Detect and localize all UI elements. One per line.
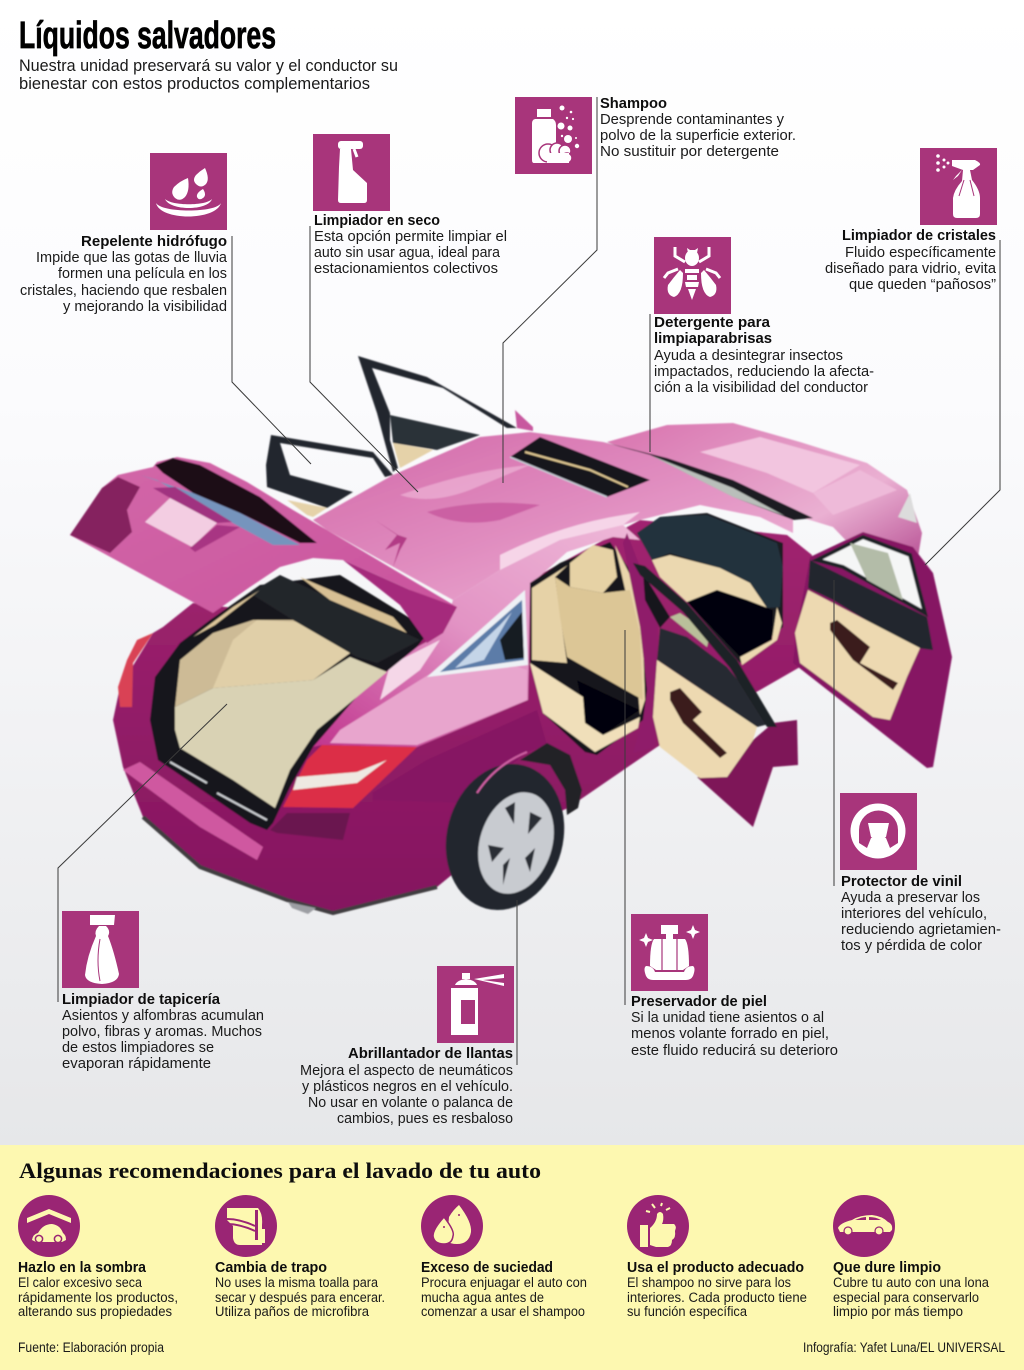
panel: Detergente para limpiaparabrisas bbox=[654, 237, 874, 396]
icon: sedan bbox=[833, 1195, 895, 1257]
icon: towel bbox=[215, 1195, 277, 1257]
illustration: pink car with open doors bbox=[70, 356, 952, 923]
icon: drops bbox=[150, 153, 227, 230]
left taillight bbox=[118, 633, 153, 707]
panel: Protector de vinil bbox=[840, 793, 1001, 954]
far front door bbox=[358, 356, 533, 472]
text: Detergente: impactados, reduciendo la afecta- bbox=[654, 364, 874, 380]
icon: mist spray bbox=[920, 148, 997, 225]
text: Protector de vinil: tos y pérdida de color bbox=[841, 938, 982, 954]
text: Hazlo en la sombra: alterando sus propiedades bbox=[18, 1304, 172, 1319]
item: Exceso de suciedad bbox=[421, 1195, 587, 1319]
text: Protector de vinil: reduciendo agrietamien- bbox=[841, 922, 1001, 938]
text: Usa el producto adecuado bbox=[627, 1260, 807, 1319]
dark shading on side bbox=[373, 710, 547, 803]
text: Que dure limpio: Cubre tu auto con una lona bbox=[833, 1275, 989, 1290]
text: Protector de vinil: interiores del vehículo, bbox=[841, 906, 987, 922]
roof bbox=[313, 432, 793, 600]
text: Shampoo: Desprende contaminantes y bbox=[600, 112, 785, 128]
text: Usa el producto adecuado: interiores. Cada producto tiene bbox=[627, 1290, 807, 1305]
source note: Fuente: Elaboración propia bbox=[18, 1340, 164, 1355]
near rear door open bbox=[633, 563, 798, 827]
text: Limpiador de tapicería bbox=[62, 992, 264, 1072]
far rear door bbox=[266, 435, 393, 517]
text: Hazlo en la sombra: El calor excesivo seca bbox=[18, 1275, 142, 1290]
text: Protector de vinil bbox=[841, 874, 1001, 954]
text: Repelente bbox=[20, 234, 228, 315]
text: Preservador de piel bbox=[631, 994, 838, 1059]
panel: Preservador de piel bbox=[631, 914, 838, 1059]
text: Detergente bbox=[654, 315, 874, 396]
text: Preservador de piel: este fluido reducirá su deterioro bbox=[631, 1043, 838, 1059]
panel: recomendaciones bbox=[0, 1145, 1024, 1370]
text: Detergente: Ayuda a desintegrar insectos bbox=[654, 348, 843, 364]
panel: Limpiador de tapicería bbox=[62, 911, 264, 1072]
text: Limpiador de tapicería: de estos limpiadores se bbox=[62, 1040, 214, 1056]
icon: car seat bbox=[631, 914, 708, 991]
recommendations heading: Algunas recomendaciones para el lavado de tu auto bbox=[19, 1158, 541, 1183]
panel: Repelente hidrófugo bbox=[20, 153, 228, 315]
text: Que dure limpio bbox=[833, 1260, 989, 1319]
text: Repelente: Repelente hidrófugo bbox=[81, 234, 227, 250]
text: Repelente: formen una película en los bbox=[58, 266, 227, 282]
text: Protector de vinil: Protector de vinil bbox=[841, 874, 962, 890]
text: Repelente: y mejorando la visibilidad bbox=[63, 299, 227, 315]
rear body bbox=[113, 520, 812, 913]
text: Limpiador de cristales: diseñado para vidrio, evita bbox=[825, 261, 997, 277]
text: Limpiador en seco: Esta opción permite limpiar el bbox=[314, 229, 507, 245]
text: Detergente: limpiaparabrisas bbox=[654, 331, 772, 347]
text: Cambia de trapo: secar y después para encerar. bbox=[215, 1290, 385, 1305]
item: Que dure limpio bbox=[833, 1195, 989, 1319]
text: Preservador de piel: menos volante forrado en piel, bbox=[631, 1026, 829, 1042]
text: Que dure limpio: limpio por más tiempo bbox=[833, 1304, 963, 1319]
text: Hazlo en la sombra: rápidamente los productos, bbox=[18, 1290, 178, 1305]
text: Preservador de piel: Preservador de piel bbox=[631, 994, 767, 1010]
front door opening bbox=[637, 513, 783, 665]
trunk interior bbox=[170, 575, 420, 820]
rear wheel bbox=[430, 751, 580, 923]
text: Exceso de suciedad: mucha agua antes de bbox=[421, 1290, 544, 1305]
trunk rim bbox=[150, 575, 428, 830]
icon: bee insect bbox=[654, 237, 731, 314]
text: Limpiador de tapicería: polvo, fibras y aromas. Muchos bbox=[62, 1024, 262, 1040]
near front door open bbox=[793, 532, 952, 768]
text: Protector de vinil: Ayuda a preservar los bbox=[841, 890, 980, 906]
text: Usa el producto adecuado: su función específica bbox=[627, 1304, 747, 1319]
windshield bbox=[603, 442, 813, 520]
text: Exceso de suciedad: Exceso de suciedad bbox=[421, 1260, 553, 1276]
text: Cambia de trapo bbox=[215, 1260, 385, 1319]
text: Repelente: cristales, haciendo que resbalen bbox=[20, 283, 227, 299]
roof mark bbox=[375, 520, 407, 567]
text: Abrillantador bbox=[300, 1046, 513, 1127]
tailgate bbox=[70, 457, 457, 643]
text: Abrillantador: Abrillantador de llantas bbox=[348, 1046, 513, 1062]
text: Shampoo bbox=[600, 96, 796, 160]
bumper strip bbox=[123, 762, 263, 860]
text: Limpiador de cristales: que queden “pañosos” bbox=[849, 277, 996, 293]
text: Cambia de trapo: Cambia de trapo bbox=[215, 1260, 327, 1276]
text: Repelente: Impide que las gotas de lluvia bbox=[36, 250, 228, 266]
sunroof bbox=[510, 437, 650, 497]
panel: Limpiador de cristales bbox=[825, 148, 997, 293]
icon: aerosol can bbox=[437, 966, 514, 1043]
text: Abrillantador: Mejora el aspecto de neumáticos bbox=[300, 1063, 513, 1079]
text: Exceso de suciedad: comenzar a usar el shampoo bbox=[421, 1304, 585, 1319]
pillar bbox=[623, 533, 658, 753]
intro text bbox=[19, 56, 398, 93]
text: Limpiador de tapicería: evaporan rápidamente bbox=[62, 1056, 211, 1072]
icon: spray bottle bbox=[313, 134, 390, 211]
text: Shampoo: No sustituir por detergente bbox=[600, 144, 779, 160]
text: Cambia de trapo: No uses la misma toalla para bbox=[215, 1275, 378, 1290]
icon: steering wheel bbox=[840, 793, 917, 870]
title: Líquidos salvadores bbox=[19, 15, 276, 57]
hood bbox=[607, 423, 922, 600]
text: Exceso de suciedad bbox=[421, 1260, 587, 1319]
leader lines bbox=[58, 97, 1000, 1065]
panel: Abrillantador de llantas bbox=[300, 966, 514, 1127]
intro text: Nuestra unidad preservará su valor y el conductor su bbox=[19, 56, 398, 75]
text: Limpiador de cristales bbox=[825, 228, 997, 293]
text: Que dure limpio: Que dure limpio bbox=[833, 1260, 941, 1276]
rear door opening with seats bbox=[530, 542, 647, 755]
text: Limpiador en seco bbox=[314, 213, 507, 277]
item: Usa el producto adecuado bbox=[627, 1195, 807, 1319]
text: Abrillantador: No usar en volante o palanca de bbox=[308, 1095, 513, 1111]
icon: shampoo and foam bbox=[515, 97, 592, 174]
text: Hazlo en la sombra bbox=[18, 1260, 178, 1319]
text: Limpiador de cristales: Limpiador de cristales bbox=[842, 228, 996, 244]
text: Cambia de trapo: Utiliza paños de microfibra bbox=[215, 1304, 369, 1319]
text: Abrillantador: cambios, pues es resbaloso bbox=[337, 1111, 513, 1127]
text: Limpiador en seco: Limpiador en seco bbox=[314, 213, 440, 229]
icon: thumbs up bbox=[627, 1195, 689, 1257]
text: Hazlo en la sombra: Hazlo en la sombra bbox=[18, 1260, 147, 1276]
icon: upholstery bottle bbox=[62, 911, 139, 988]
icon: car under roof bbox=[18, 1195, 80, 1257]
text: Que dure limpio: especial para conservarlo bbox=[833, 1290, 979, 1305]
rear taillight bbox=[283, 745, 417, 808]
text: Exceso de suciedad: Procura enjuagar el auto con bbox=[421, 1275, 587, 1290]
text: Abrillantador: y plásticos negros en el vehículo. bbox=[302, 1079, 513, 1095]
text: Limpiador de cristales: Fluido específicamente bbox=[845, 245, 996, 261]
text: Detergente: ción a la visibilidad del conductor bbox=[654, 380, 868, 396]
wheel arch bbox=[520, 743, 582, 815]
text: Shampoo: polvo de la superficie exterior. bbox=[600, 128, 796, 144]
text: Limpiador de tapicería: Asientos y alfombras acumulan bbox=[62, 1008, 264, 1024]
text: Detergente: Detergente para bbox=[654, 315, 771, 331]
text: Limpiador en seco: auto sin usar agua, ideal para bbox=[314, 245, 501, 261]
text: Preservador de piel: Si la unidad tiene asientos o al bbox=[631, 1010, 824, 1026]
panel: Shampoo bbox=[515, 96, 796, 174]
icon: water drops bbox=[421, 1195, 483, 1257]
panel: Limpiador en seco bbox=[313, 134, 507, 277]
shoulder highlight bbox=[313, 525, 640, 747]
text: Limpiador de tapicería: Limpiador de tapicería bbox=[62, 992, 221, 1008]
item: Cambia de trapo bbox=[215, 1195, 385, 1319]
side window bbox=[427, 590, 528, 677]
text: Usa el producto adecuado: El shampoo no sirve para los bbox=[627, 1275, 791, 1290]
text: Usa el producto adecuado: Usa el producto adecuado bbox=[627, 1260, 804, 1276]
text: Limpiador en seco: estacionamientos colectivos bbox=[314, 261, 498, 277]
intro text: bienestar con estos productos complementarios bbox=[19, 74, 370, 93]
text: Shampoo: Shampoo bbox=[600, 96, 667, 112]
item: Hazlo en la sombra bbox=[18, 1195, 178, 1319]
